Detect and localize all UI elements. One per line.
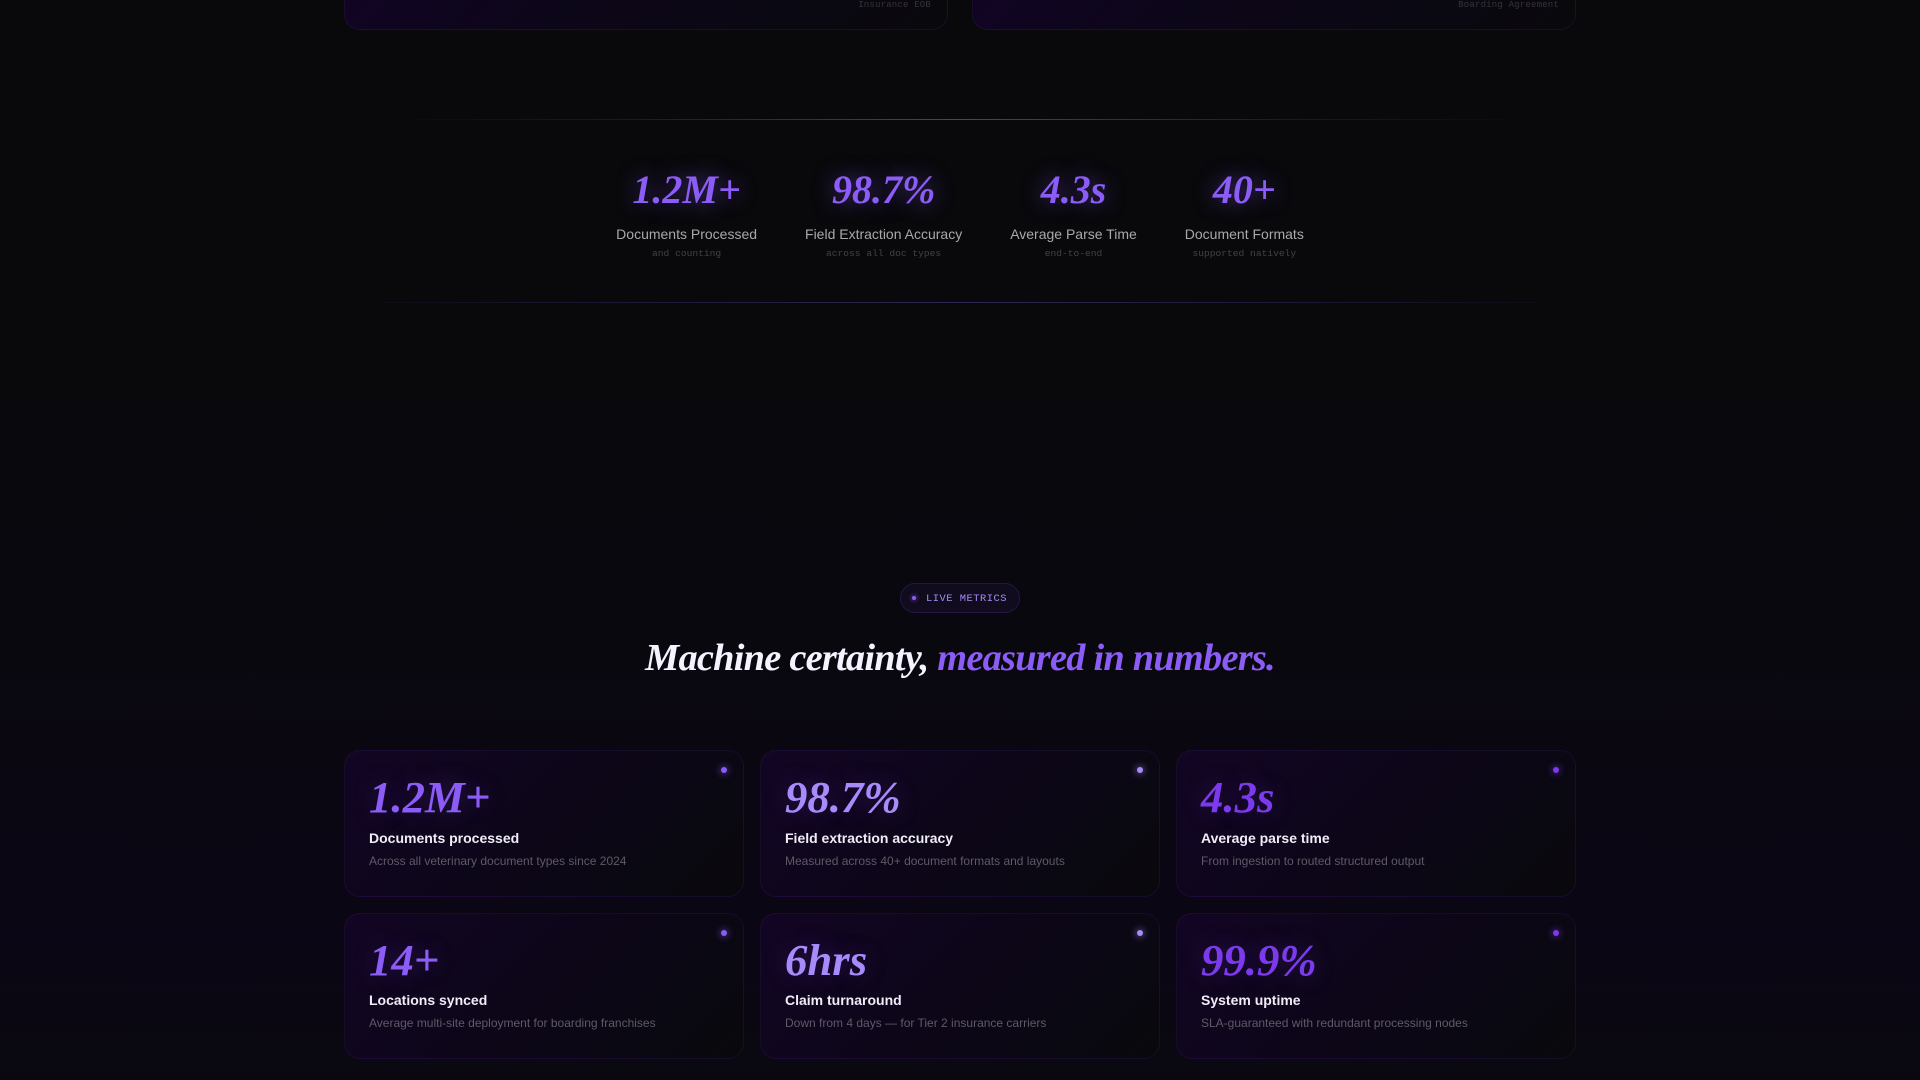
metric card: system uptime: 99.9% xyxy=(1201,935,1317,985)
stat: documents processed: and counting xyxy=(652,248,721,259)
badge: live metrics xyxy=(900,583,1020,613)
metric card: average parse time: 4.3s xyxy=(1201,772,1274,822)
stat: average parse time: Average Parse Time xyxy=(1010,226,1137,242)
metric card: claim turnaround: 6hrs xyxy=(785,935,867,985)
metric card: system uptime: SLA-guaranteed with redundant processing nodes xyxy=(1201,1016,1468,1030)
metric card: claim turnaround xyxy=(760,912,1160,1058)
metric card: documents processed: 1.2M+ xyxy=(369,772,490,822)
metric card: locations synced xyxy=(344,912,744,1058)
panel: top right card (cropped): Boarding Agreement xyxy=(1458,0,1559,10)
metric card: documents processed xyxy=(344,750,744,897)
stat: field extraction accuracy: Field Extraction Accuracy xyxy=(805,226,962,242)
metric card: locations synced: Average multi-site deployment for boarding franchises xyxy=(369,1016,656,1030)
stat: document formats: supported natively xyxy=(1192,248,1296,259)
badge: live metrics: LIVE METRICS xyxy=(926,593,1007,605)
stat: field extraction accuracy: across all doc types xyxy=(826,248,941,259)
metric card: field extraction accuracy: 98.7% xyxy=(785,772,901,822)
metric card: field extraction accuracy: Field extraction accuracy xyxy=(785,830,953,846)
heading: Machine certainty, measured in numbers. xyxy=(645,637,1275,679)
stat: document formats xyxy=(1185,167,1304,259)
metric card: claim turnaround: Down from 4 days — for Tier 2 insurance carriers xyxy=(785,1016,1046,1030)
stat: documents processed: 1.2M+ xyxy=(632,167,741,212)
metric card: documents processed: Documents processed xyxy=(369,830,519,846)
metric card: average parse time: From ingestion to routed structured output xyxy=(1201,854,1424,868)
metric card: claim turnaround: Claim turnaround xyxy=(785,992,902,1008)
panel: top left card (cropped): Insurance EOB xyxy=(858,0,931,10)
metric card: documents processed: Across all veterinary document types since 2024 xyxy=(369,854,626,868)
metric card: average parse time: Average parse time xyxy=(1201,830,1330,846)
stat: average parse time: end-to-end xyxy=(1045,248,1102,259)
metric card: locations synced: 14+ xyxy=(369,935,439,985)
metric card: field extraction accuracy: Measured across 40+ document formats and layouts xyxy=(785,854,1065,868)
stat: documents processed xyxy=(616,167,757,259)
panel: top right card (cropped) xyxy=(972,0,1576,30)
metric card: average parse time xyxy=(1176,750,1576,897)
panel: top left card (cropped) xyxy=(344,0,948,30)
metric card: locations synced: Locations synced xyxy=(369,992,487,1008)
stat: document formats: Document Formats xyxy=(1185,226,1304,242)
stat: document formats: 40+ xyxy=(1213,167,1276,212)
metric card: system uptime xyxy=(1176,912,1576,1058)
stat: documents processed: Documents Processed xyxy=(616,226,757,242)
metric card: field extraction accuracy xyxy=(760,750,1160,897)
stat: average parse time xyxy=(1010,167,1137,259)
stat: field extraction accuracy xyxy=(805,167,962,259)
stat: average parse time: 4.3s xyxy=(1041,167,1106,212)
stats row xyxy=(616,167,1304,259)
metric card: system uptime: System uptime xyxy=(1201,992,1301,1008)
stat: field extraction accuracy: 98.7% xyxy=(832,167,935,212)
